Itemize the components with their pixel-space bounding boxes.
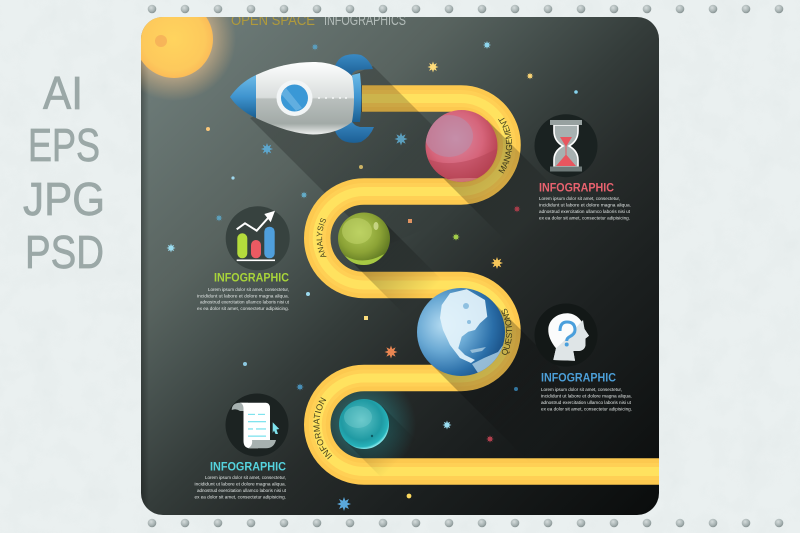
panel title: INFOGRAPHICS (324, 12, 406, 29)
teal planet glow (330, 391, 411, 458)
green planet long shadow (352, 223, 436, 298)
block: management text: ex ea dolor sit amet, consectetur adipisicing. (539, 216, 630, 220)
block: questions text: incididunt ut labore et dolore magna aliqua. (541, 394, 632, 398)
hull rivets (318, 97, 347, 99)
block: analysis text: adnostrud exercitation ullamco laboris nisi ut (200, 300, 290, 305)
block: information text: incididunt ut labore et dolore magna aliqua. (194, 482, 286, 486)
red planet long shadow (440, 120, 530, 214)
teal planet long shadow (346, 406, 399, 473)
planet: globe (417, 288, 505, 376)
rear band (352, 73, 362, 122)
planet: red (425, 110, 498, 185)
icon: head with question mark (534, 304, 598, 366)
porthole (276, 80, 312, 116)
planet: green (338, 212, 390, 265)
block: analysis text: incididunt ut labore et dolore magna aliqua. (197, 293, 289, 298)
rivets along the top edge (148, 5, 783, 13)
block: management text: incididunt ut labore et dolore magna aliqua. (539, 202, 631, 208)
rocket shadow on the road (361, 85, 419, 112)
block: analysis text (197, 272, 290, 311)
side format labels: AI (43, 67, 83, 119)
block: information text (194, 461, 287, 499)
stars (166, 41, 578, 511)
nose cone (230, 75, 256, 118)
winding yellow road (317, 98, 660, 472)
bottom fin (335, 120, 374, 143)
main dark panel (141, 17, 659, 515)
rivets along the bottom edge (148, 519, 783, 527)
block: management text (539, 182, 631, 220)
side format labels: EPS (28, 119, 100, 171)
block: questions text: adnostrud exercitation ullamco laboris nisi ut (541, 400, 632, 405)
block: questions text: Lorem ipsum dolor sit amet, consectetur, (541, 387, 622, 392)
icon: scroll with cursor (226, 394, 288, 456)
road label: analysis: ANALYSIS (316, 218, 326, 257)
icon: bar chart (226, 206, 290, 270)
block: analysis text: Lorem ipsum dolor sit amet, consectetur, (208, 287, 289, 292)
rocket (230, 54, 374, 143)
block: questions text: INFOGRAPHIC (541, 372, 617, 385)
top fin (335, 54, 373, 76)
block: analysis text: INFOGRAPHIC (214, 272, 290, 284)
block: information text: ex ea dolor sit amet, consectetur adipisicing. (194, 494, 286, 499)
road label: management: MANAGEMENT (498, 118, 512, 174)
panel title (232, 17, 406, 25)
globe long shadow (432, 302, 521, 392)
block: questions text: ex ea dolor sit amet, consectetur adipisicing. (541, 406, 632, 411)
block: management text: INFOGRAPHIC (539, 182, 615, 194)
side format labels: JPG (23, 173, 105, 225)
road label: questions: QUESTIONS (502, 308, 512, 355)
planet: teal (339, 399, 389, 449)
block: management text: Lorem ipsum dolor sit amet, consectetur, (539, 196, 620, 201)
block: questions text (541, 372, 632, 411)
side format labels (23, 67, 105, 278)
rocket long shadow (250, 66, 432, 223)
block: management text: adnostrud exercitation ullamco laboris nisi ut (539, 209, 631, 214)
sun (141, 17, 233, 98)
block: analysis text: ex ea dolor sit amet, consectetur adipisicing. (197, 306, 289, 311)
side format labels: PSD (25, 226, 104, 278)
hull (256, 62, 355, 134)
block: information text: adnostrud exercitation ullamco laboris nisi ut (197, 488, 287, 493)
icon: hourglass (534, 114, 598, 177)
block: information text: Lorem ipsum dolor sit amet, consectetur, (205, 475, 286, 480)
block: information text: INFOGRAPHIC (210, 461, 287, 474)
panel title: OPEN SPACE (231, 12, 315, 29)
road label: information: INFORMATION (313, 397, 332, 460)
